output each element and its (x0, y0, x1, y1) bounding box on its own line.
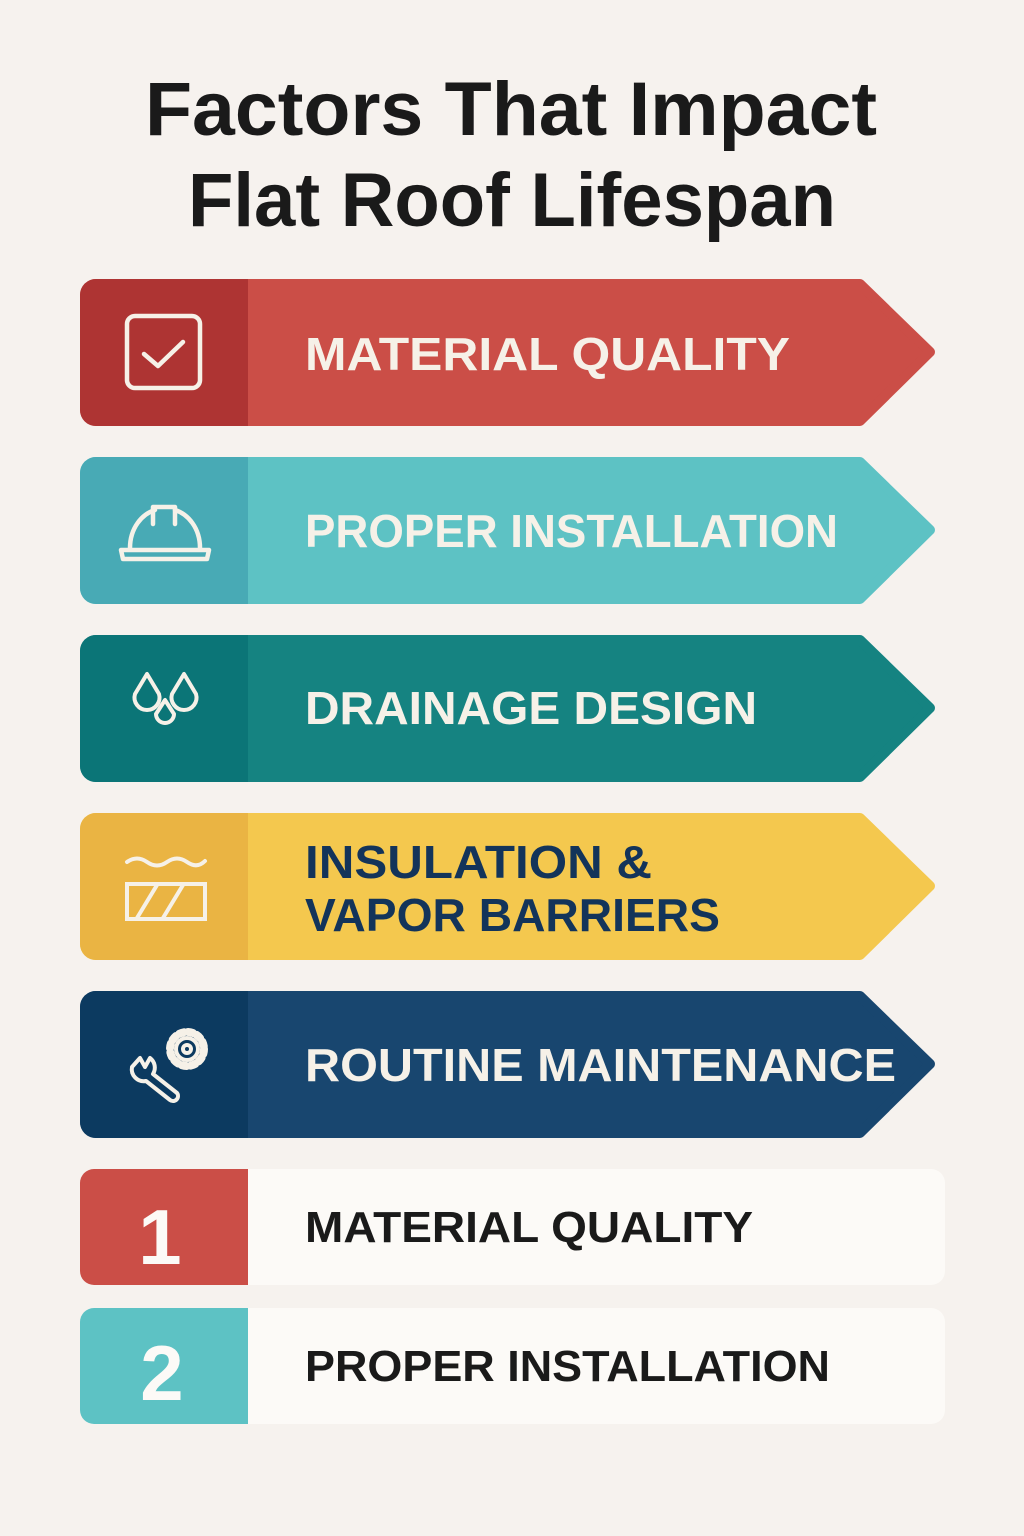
icon: water drops (134, 674, 196, 723)
title: Factors That Impact (145, 67, 877, 152)
banner: drainage design (80, 635, 930, 782)
banner: drainage design: DRAINAGE DESIGN (305, 682, 757, 734)
banner: routine maintenance (80, 991, 930, 1138)
banner: proper installation: PROPER INSTALLATION (305, 505, 838, 557)
list item 2 (80, 1308, 945, 1424)
banner: routine maintenance: ROUTINE MAINTENANCE (305, 1039, 896, 1091)
list item 2: PROPER INSTALLATION (305, 1342, 830, 1391)
list item 1: MATERIAL QUALITY (305, 1203, 753, 1252)
banner: insulation & vapor barriers: INSULATION & (305, 836, 652, 888)
list item 1: 1 (138, 1193, 182, 1281)
list item 1 (80, 1169, 945, 1285)
title: Flat Roof Lifespan (188, 158, 836, 243)
title (145, 67, 877, 243)
icon: insulation layer (127, 858, 205, 919)
icon: wrench and gear (132, 1032, 204, 1101)
banner: material quality (80, 279, 930, 426)
banner: material quality: MATERIAL QUALITY (305, 328, 790, 380)
list item 2: 2 (140, 1329, 184, 1417)
icon: hard hat (121, 507, 209, 559)
banner: proper installation (80, 457, 930, 604)
banner: insulation & vapor barriers: VAPOR BARRIERS (305, 889, 720, 941)
banner: insulation & vapor barriers (80, 813, 930, 960)
icon: checkbox (127, 316, 200, 388)
